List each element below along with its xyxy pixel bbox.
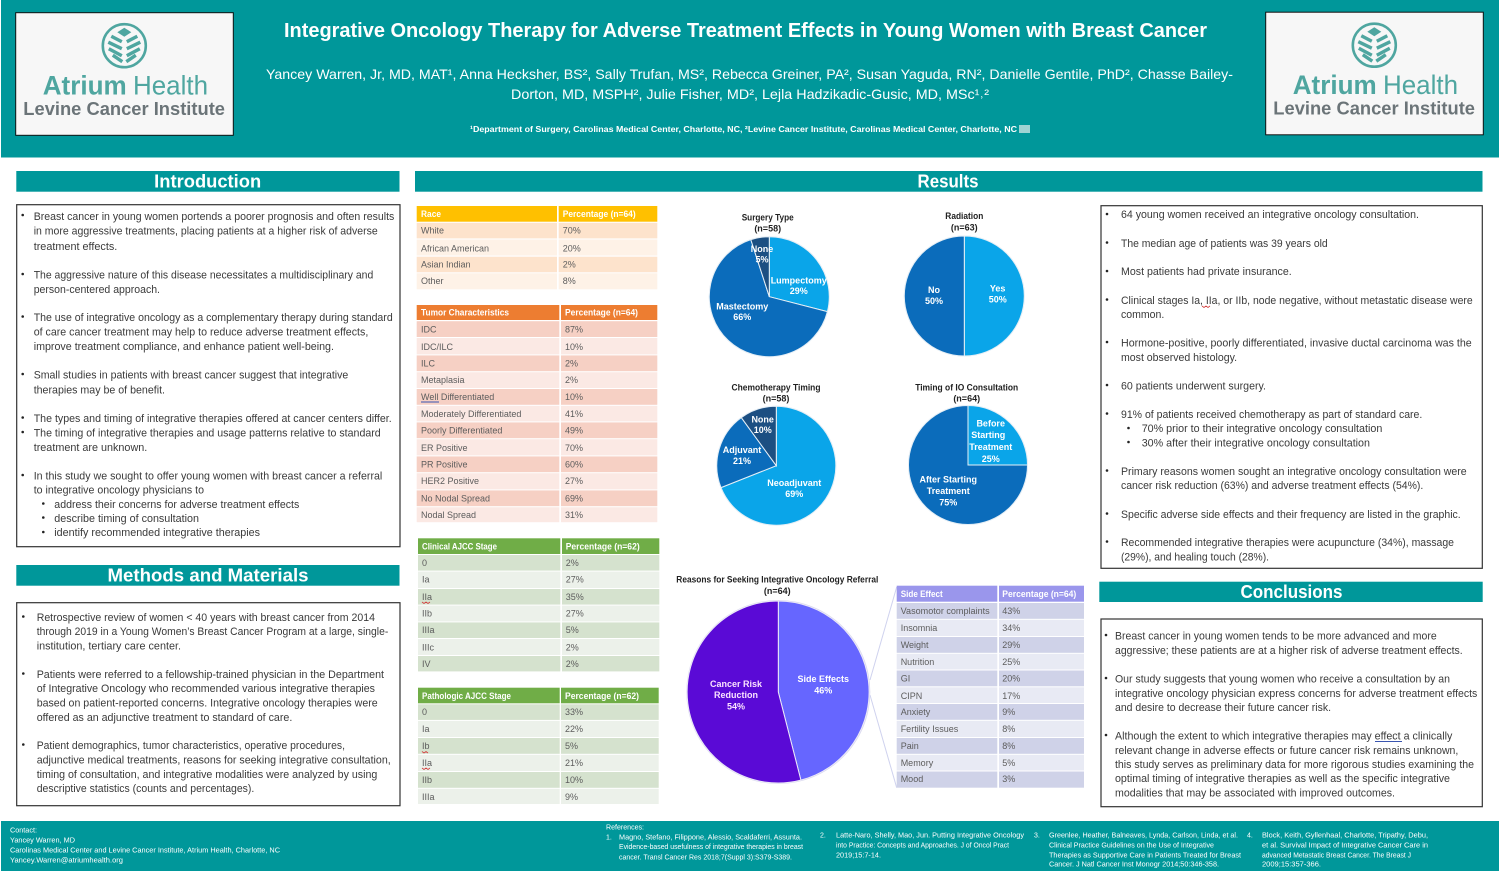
table: clinical AJCC stage: 2% <box>566 558 579 568</box>
table: race: 8% <box>563 276 576 286</box>
references: Latte-Naro, Shelly, Mao, Jun. Putting Integrative Oncology <box>836 832 1025 840</box>
logo: right: Levine Cancer Institute <box>1273 98 1475 118</box>
heading: Methods and Materials <box>16 565 400 586</box>
table: tumor characteristics: 10% <box>565 342 583 352</box>
panel: methods text: Retrospective review of women < 40 years with breast cancer from 2014 <box>37 612 375 624</box>
pie chart: reasons for seeking referral: 46% <box>814 685 832 695</box>
table: race: African American <box>421 243 489 253</box>
table: clinical AJCC stage: 27% <box>566 608 584 618</box>
affiliations: ¹Department of Surgery, Carolinas Medical Center, Charlotte, NC, ²Levine Cancer Institute, Carolinas Medical Center, Charlotte, NC <box>470 124 1017 134</box>
table: clinical AJCC stage: 0 <box>422 558 427 568</box>
table: tumor characteristics: No Nodal Spread <box>421 494 490 504</box>
panel: results summary text: Specific adverse side effects and their frequency are listed in the graphic. <box>1121 509 1461 521</box>
panel: methods text: institution, tertiary care center. <box>37 640 181 652</box>
references: Evidence-based usefulness of integrative therapies in breast <box>619 844 803 851</box>
table: side effects: Pain <box>901 741 919 751</box>
references: 2. <box>820 832 826 840</box>
heading: Results <box>415 171 1482 192</box>
pie chart: radiation: No <box>928 285 940 295</box>
footer banner <box>1 821 1499 871</box>
pie chart: chemotherapy timing: Adjuvant <box>723 445 761 455</box>
pie chart: radiation <box>904 211 1025 356</box>
table: tumor characteristics: 49% <box>565 426 583 436</box>
panel: introduction text: treatment are unknown. <box>34 442 147 454</box>
panel: results summary text: The median age of patients was 39 years old <box>1121 238 1328 250</box>
references: into Practice: Concepts and Approaches. J of Oncol Pract <box>836 842 1009 850</box>
pie chart: timing of IO consultation: Treatment <box>927 486 970 496</box>
panel: introduction text: Small studies in patients with breast cancer suggest that integrative <box>34 370 348 382</box>
references: References: <box>606 824 644 832</box>
panel: results summary text: Recommended integrative therapies were acupuncture (34%), massage <box>1121 537 1454 549</box>
heading: Methods and Materials: Methods and Materials <box>108 566 308 586</box>
pie chart: surgery type: None <box>751 244 773 254</box>
panel: conclusions text: aggressive; these patients are at a higher risk of adverse treatment effects. <box>1115 645 1463 657</box>
references: Block, Keith, Gyllenhaal, Charlotte, Tripathy, Debu, <box>1262 832 1428 840</box>
panel: conclusions text: Breast cancer in young women tends to be more advanced and more <box>1115 630 1437 642</box>
pie chart: timing of IO consultation: Starting <box>971 430 1005 440</box>
table: race: Other <box>421 276 444 286</box>
heading: Introduction <box>16 171 400 192</box>
table: clinical AJCC stage: 27% <box>566 574 584 584</box>
panel: conclusions text: relevant change in adverse effects or future cancer risk remains unknown, <box>1115 745 1458 757</box>
table: tumor characteristics: PR Positive <box>421 460 468 470</box>
logo wordmark: Atrium <box>1293 70 1377 100</box>
authors: Yancey Warren, Jr, MD, MAT¹, Anna Hecksher, BS², Sally Trufan, MS², Rebecca Greiner, PA², Susan Yaguda, RN², Danielle Gentile, PhD², Chasse Bailey- <box>266 66 1233 82</box>
heading: Conclusions <box>1099 582 1483 602</box>
panel: methods text: offered as an adjunctive treatment to standard of care. <box>37 712 292 724</box>
table: clinical AJCC stage: IIa <box>422 592 432 602</box>
table: race: Asian Indian <box>421 260 471 270</box>
table: tumor characteristics: ILC <box>421 358 436 368</box>
table: tumor characteristics: 70% <box>565 443 583 453</box>
table: side effects: 43% <box>1002 606 1020 616</box>
table: race: Percentage (n=64) <box>563 209 636 219</box>
pie chart: surgery type <box>709 212 830 357</box>
table: clinical AJCC stage: Ia <box>422 574 430 584</box>
pie chart: timing of IO consultation: 25% <box>982 454 1000 464</box>
pie chart: surgery type: 29% <box>790 286 808 296</box>
pie chart: reasons for seeking referral: 54% <box>727 701 745 711</box>
table: tumor characteristics <box>417 305 657 522</box>
table: side effects: GI <box>901 674 910 684</box>
table: pathologic AJCC stage: Percentage (n=62) <box>565 691 639 701</box>
table: race: White <box>421 226 444 236</box>
panel: results summary text: 30% after their integrative oncology consultation <box>1142 438 1370 450</box>
pie chart: surgery type: (n=58) <box>754 224 781 234</box>
pie chart: chemotherapy timing: None <box>751 414 774 424</box>
panel: methods text: Patients were referred to a fellowship-trained physician in the Department <box>37 669 384 681</box>
pie chart: timing of IO consultation: 75% <box>939 497 957 507</box>
panel: introduction text: to integrative oncology physicians to <box>34 484 204 496</box>
panel: introduction text: person-centered approach. <box>34 284 160 296</box>
table: tumor characteristics: Metaplasia <box>421 375 465 385</box>
pie chart: timing of IO consultation: (n=64) <box>953 394 980 404</box>
table: side effects: Insomnia <box>901 623 937 633</box>
contact block: Yancey Warren, MD <box>10 838 75 844</box>
heading: Results: Results <box>918 172 978 192</box>
table: pathologic AJCC stage: Pathologic AJCC Stage <box>422 691 511 701</box>
references: 1. <box>606 834 612 842</box>
icon: tree in circle <box>1353 24 1396 67</box>
icon: tree in circle <box>103 24 146 67</box>
table: side effects: 25% <box>1002 657 1020 667</box>
pie chart: reasons for seeking referral: Side Effects <box>798 674 849 684</box>
panel: results summary text: most observed histology. <box>1121 352 1237 364</box>
table: tumor characteristics: 2% <box>565 358 578 368</box>
panel: conclusions text: Although the extent to which integrative therapies may effect a clinically <box>1115 730 1453 742</box>
contact block: Carolinas Medical Center and Levine Cancer Institute, Atrium Health, Charlotte, NC <box>10 848 280 854</box>
pie chart: chemotherapy timing: 69% <box>785 489 803 499</box>
pie chart: surgery type: Lumpectomy <box>771 275 827 285</box>
panel: introduction text: The aggressive nature of this disease necessitates a multidisciplinary and <box>34 270 373 282</box>
panel: methods text <box>17 603 400 806</box>
table: tumor characteristics: Percentage (n=64) <box>565 308 638 318</box>
logo: right <box>1266 12 1483 135</box>
table: pathologic AJCC stage: Ia <box>422 724 430 734</box>
table: side effects: CIPN <box>901 691 922 701</box>
references: 3. <box>1034 832 1040 840</box>
references: cancer. Transl Cancer Res 2018;7(Suppl 3):S379-S389. <box>619 854 792 862</box>
pie chart: chemotherapy timing: Chemotherapy Timing <box>732 382 820 392</box>
panel: introduction text: describe timing of consultation <box>54 513 199 525</box>
header banner <box>1 0 1499 158</box>
table: tumor characteristics: HER2 Positive <box>421 476 479 486</box>
panel: introduction text: in more aggressive treatments, placing patients at a higher risk of adverse <box>34 226 378 238</box>
references: advanced Metastatic Breast Cancer. The Breast J <box>1262 852 1411 860</box>
panel: conclusions text: integrative oncology physician express concerns for adverse treatment effects <box>1115 688 1478 700</box>
table: side effects: Mood <box>901 774 923 784</box>
table: tumor characteristics: Well Differentiated <box>421 392 494 402</box>
pie chart: chemotherapy timing: 10% <box>754 425 772 435</box>
panel: results summary text: 64 young women received an integrative oncology consultation. <box>1121 209 1419 221</box>
table: pathologic AJCC stage: IIb <box>422 775 432 785</box>
table: clinical AJCC stage: IIIc <box>422 642 435 652</box>
table: pathologic AJCC stage: 10% <box>565 775 583 785</box>
table: side effects: Percentage (n=64) <box>1002 589 1076 599</box>
table: pathologic AJCC stage: IIIa <box>422 792 435 802</box>
pie chart: reasons for seeking referral: (n=64) <box>764 586 791 596</box>
panel: results summary text: (29%), and healing touch (28%). <box>1121 552 1269 564</box>
table: side effects: 29% <box>1002 640 1020 650</box>
table: pathologic AJCC stage: 21% <box>565 758 583 768</box>
references: Clinical Practice Guidelines on the Use of Integrative <box>1049 842 1214 850</box>
pie chart: radiation: 50% <box>925 296 943 306</box>
logo wordmark: Atrium <box>43 70 127 100</box>
pie chart: surgery type: Mastectomy <box>716 301 768 311</box>
table: side effects: Weight <box>901 640 929 650</box>
panel: methods text: adjunctive medical treatments, reasons for seeking integrative consultation, <box>37 754 391 766</box>
table: tumor characteristics: 10% <box>565 392 583 402</box>
table: pathologic AJCC stage: IIa <box>422 758 432 768</box>
panel: results summary text: cancer risk reduction (63%) and adverse treatment effects (54%). <box>1121 480 1423 492</box>
panel: conclusions text: modalities that may be associated with improved outcomes. <box>1115 788 1395 800</box>
table: clinical AJCC stage: IIb <box>422 608 432 618</box>
logo: left: Health <box>133 70 208 100</box>
pie chart: timing of IO consultation: Timing of IO Consultation <box>915 382 1018 392</box>
table: clinical AJCC stage: Clinical AJCC Stage <box>422 542 497 552</box>
heading: Introduction: Introduction <box>154 172 261 192</box>
panel: introduction text: Breast cancer in young women portends a poorer prognosis and often results <box>34 211 395 223</box>
table: clinical AJCC stage: 2% <box>566 642 579 652</box>
panel: methods text: Patient demographics, tumor characteristics, operative procedures, <box>37 740 345 752</box>
table: pathologic AJCC stage: 22% <box>565 724 583 734</box>
table: clinical AJCC stage <box>418 538 659 671</box>
pie chart: reasons for seeking referral <box>676 574 878 784</box>
pie chart: radiation: Yes <box>990 283 1005 293</box>
table: tumor characteristics: Moderately Differentiated <box>421 409 521 419</box>
panel: conclusions text: and desire to decrease their future cancer risk. <box>1115 702 1331 714</box>
panel: methods text: timing of consultation, and integrative modalities were analyzed by using <box>37 769 377 781</box>
connector lines: pie to side effect table <box>870 587 897 788</box>
table: race: 2% <box>563 260 576 270</box>
table: side effects: Side Effect <box>901 589 943 599</box>
logo: right: Health <box>1383 70 1458 100</box>
panel: conclusions text: this study serves as preliminary data for more rigorous studies examining the <box>1115 759 1474 771</box>
table: tumor characteristics: 60% <box>565 460 583 470</box>
heading: Conclusions: Conclusions <box>1240 582 1342 602</box>
pie chart: reasons for seeking referral: Reduction <box>714 690 758 700</box>
panel: introduction text: address their concerns for adverse treatment effects <box>54 499 300 511</box>
references: Greenlee, Heather, Balneaves, Lynda, Carlson, Linda, et al. <box>1049 832 1238 840</box>
table: side effects: 9% <box>1002 707 1015 717</box>
table: tumor characteristics: 41% <box>565 409 583 419</box>
table: race: Race <box>421 209 441 219</box>
references <box>606 824 1428 868</box>
table: side effects: 5% <box>1002 758 1015 768</box>
table: tumor characteristics: Poorly Differentiated <box>421 426 502 436</box>
references: 4. <box>1247 832 1253 840</box>
pie chart: radiation: 50% <box>989 294 1007 304</box>
panel: conclusions text: Our study suggests that young women who receive a consultation by an <box>1115 674 1450 686</box>
panel: introduction text: In this study we sought to offer young women with breast cancer a referral <box>34 470 382 482</box>
references: Therapies as Supportive Care in Patients Treated for Breast <box>1049 852 1241 860</box>
panel: methods text: of Integrative Oncology who recommended various integrative therapies <box>37 683 375 695</box>
table: tumor characteristics: IDC <box>421 324 437 334</box>
panel: introduction text: improve treatment compliance, and enhance patient well-being. <box>34 341 334 353</box>
table: tumor characteristics: 69% <box>565 494 583 504</box>
table: side effects: 3% <box>1002 774 1015 784</box>
panel: conclusions text: optimal timing of integrative therapies as well as the specific integrative <box>1115 773 1450 785</box>
table: tumor characteristics: 27% <box>565 476 583 486</box>
pie chart: surgery type: 5% <box>755 254 769 264</box>
pie chart: timing of IO consultation: Treatment <box>969 442 1012 452</box>
pie chart: surgery type: Surgery Type <box>742 212 794 222</box>
references: Cancer. J Natl Cancer Inst Monogr 2014;50:346-358. <box>1049 862 1219 868</box>
table: tumor characteristics: Tumor Characteristics <box>421 308 509 318</box>
table: side effects: 17% <box>1002 691 1020 701</box>
table: clinical AJCC stage: IIIa <box>422 625 435 635</box>
table: side effects: 8% <box>1002 741 1015 751</box>
panel: methods text: descriptive statistics (counts and percentages). <box>37 783 254 795</box>
table: tumor characteristics: 2% <box>565 375 578 385</box>
table: clinical AJCC stage: IV <box>422 659 431 669</box>
references: et al. Survival Impact of Integrative Cancer Care in <box>1262 842 1428 850</box>
table: side effects: Anxiety <box>901 707 931 717</box>
table: side effects: 20% <box>1002 674 1020 684</box>
panel: results summary text: 91% of patients received chemotherapy as part of standard care. <box>1121 409 1422 421</box>
table: race <box>417 206 657 289</box>
panel: methods text: based on patient-reported concerns. Integrative oncology therapies were <box>37 698 378 710</box>
panel: results summary text: 70% prior to their integrative oncology consultation <box>1142 423 1382 435</box>
panel: introduction text: The timing of integrative therapies and usage patterns relative to standard <box>34 428 381 440</box>
pie chart: surgery type: 66% <box>733 312 751 322</box>
table: tumor characteristics: Nodal Spread <box>421 510 476 520</box>
pie chart: chemotherapy timing: Neoadjuvant <box>767 478 821 488</box>
panel: results summary text: 60 patients underwent surgery. <box>1121 380 1266 392</box>
references: 2019;15:7-14. <box>836 852 881 860</box>
table: side effects: Vasomotor complaints <box>901 606 990 616</box>
panel: introduction text <box>17 205 400 547</box>
panel: results summary text: Primary reasons women sought an integrative oncology consultation were <box>1121 466 1467 478</box>
pie chart: chemotherapy timing: 21% <box>733 456 751 466</box>
table: clinical AJCC stage: Percentage (n=62) <box>566 542 640 552</box>
table: tumor characteristics: 87% <box>565 324 583 334</box>
panel: introduction text: therapies may be of benefit. <box>34 384 165 396</box>
pie chart: timing of IO consultation: Before <box>976 418 1005 428</box>
pie chart: reasons for seeking referral: Cancer Risk <box>710 679 763 689</box>
panel: introduction text: The types and timing of integrative therapies offered at cancer centers differ. <box>34 413 392 425</box>
pie chart: radiation: (n=63) <box>951 222 978 232</box>
table: side effects: 8% <box>1002 724 1015 734</box>
table: clinical AJCC stage: 2% <box>566 659 579 669</box>
panel: introduction text: identify recommended integrative therapies <box>54 527 260 539</box>
contact block: Yancey.Warren@atriumhealth.org <box>10 858 123 864</box>
pie chart: timing of IO consultation: After Starting <box>920 474 977 484</box>
table: pathologic AJCC stage: 9% <box>565 792 578 802</box>
table: tumor characteristics: IDC/ILC <box>421 342 454 352</box>
authors: Dorton, MD, MSPH², Julie Fisher, MD², Lejla Hadzikadic-Gusic, MD, MSc¹˒² <box>511 86 989 102</box>
panel: introduction text: of care cancer treatment may help to reduce adverse treatment effects, <box>34 326 368 338</box>
panel: introduction text: The use of integrative oncology as a complementary therapy during standard <box>34 312 393 324</box>
contact block: Contact: <box>10 828 37 834</box>
table: side effects: 34% <box>1002 623 1020 633</box>
table: race: 70% <box>563 226 581 236</box>
pie chart: radiation: Radiation <box>945 211 983 221</box>
table: pathologic AJCC stage: Ib <box>422 741 430 751</box>
table: pathologic AJCC stage: 33% <box>565 707 583 717</box>
title: Integrative Oncology Therapy for Adverse Treatment Effects in Young Women with Breast Cancer <box>284 20 1207 42</box>
table: pathologic AJCC stage: 0 <box>422 707 427 717</box>
pie chart: timing of IO consultation <box>908 382 1028 525</box>
contact block <box>10 828 280 864</box>
authors <box>266 66 1233 102</box>
pie chart: chemotherapy timing <box>716 382 836 526</box>
references: 2009;15:357-366. <box>1262 862 1321 868</box>
panel: results summary text: Hormone-positive, poorly differentiated, invasive ductal carcinoma was the <box>1121 338 1472 350</box>
panel: conclusions text <box>1101 619 1482 807</box>
panel: introduction text: treatment effects. <box>34 241 117 253</box>
pie chart: chemotherapy timing: (n=58) <box>763 394 789 404</box>
table: race: 20% <box>563 243 581 253</box>
pie chart: reasons for seeking referral: Reasons for Seeking Integrative Oncology Referral <box>676 574 878 584</box>
table: pathologic AJCC stage: 5% <box>565 741 578 751</box>
table: clinical AJCC stage: 35% <box>566 592 584 602</box>
table: side effects: Memory <box>901 758 934 768</box>
references: Magno, Stefano, Filippone, Alessio, Scaldaferri, Assunta. <box>619 834 802 842</box>
panel: results summary text: common. <box>1121 309 1164 321</box>
table: side effects: Fertility Issues <box>901 724 959 734</box>
table: clinical AJCC stage: 5% <box>566 625 579 635</box>
logo: left <box>16 13 233 135</box>
panel: results summary text <box>1101 206 1482 568</box>
table: pathologic AJCC stage <box>418 688 659 804</box>
panel: methods text: through 2019 in a Young Women’s Breast Cancer Program at a large, single- <box>37 626 389 638</box>
table: tumor characteristics: 31% <box>565 510 583 520</box>
panel: results summary text: Clinical stages Ia, IIa, or IIb, node negative, without metastatic disease were <box>1121 295 1473 307</box>
panel: results summary text: Most patients had private insurance. <box>1121 266 1292 278</box>
table: side effects <box>897 586 1084 788</box>
table: side effects: Nutrition <box>901 657 934 667</box>
table: tumor characteristics: ER Positive <box>421 443 468 453</box>
logo: left: Levine Cancer Institute <box>23 98 225 119</box>
